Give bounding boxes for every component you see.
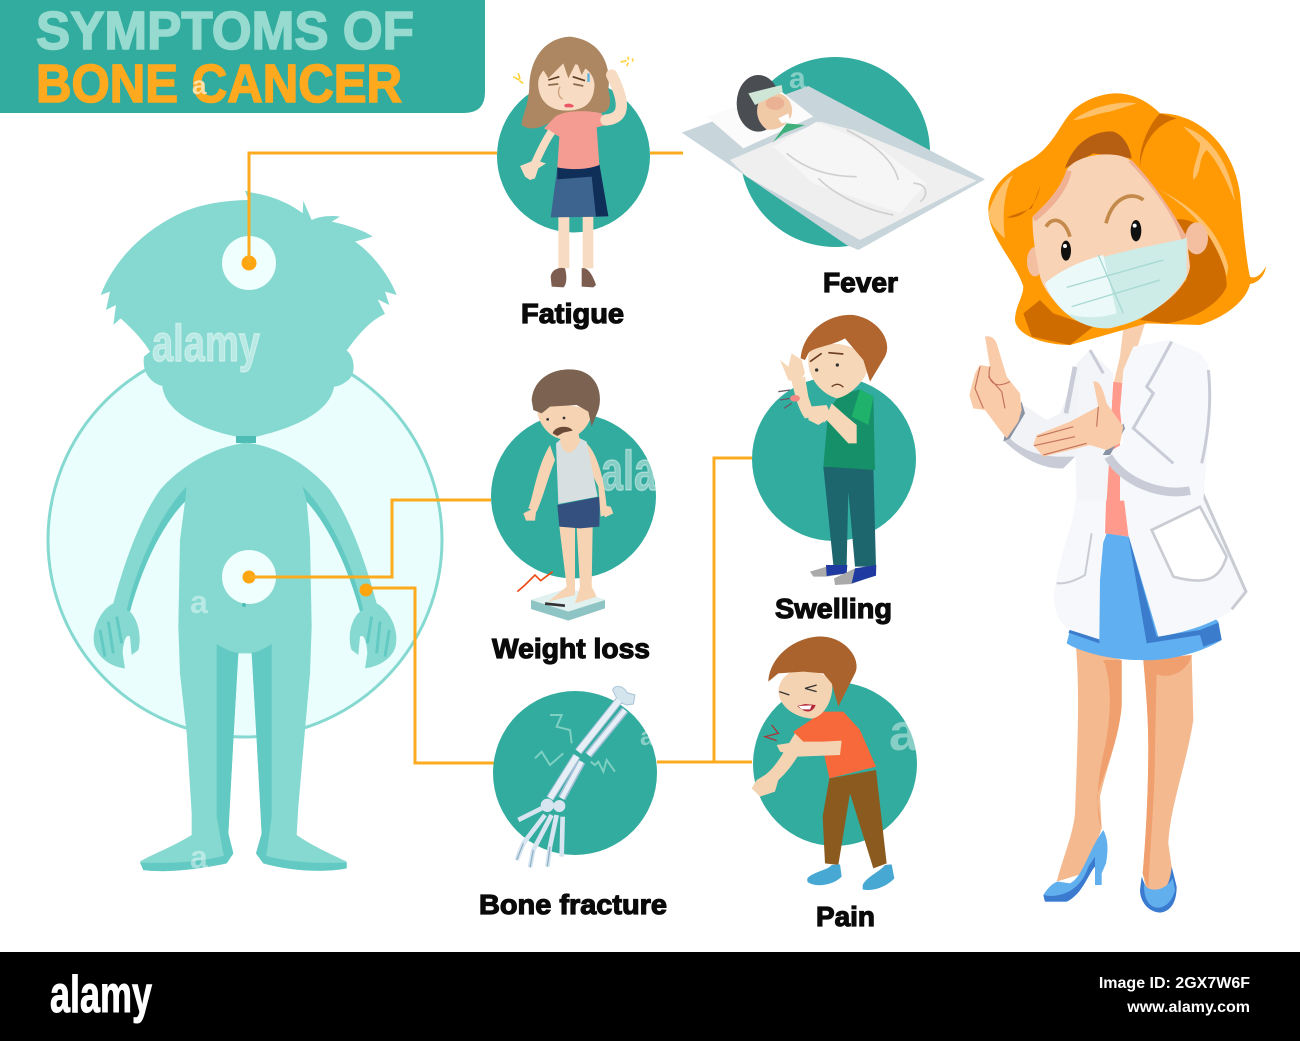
illustration: broken arm bones — [517, 686, 635, 867]
tumor marker: head — [222, 236, 276, 290]
illustration: doctor with mask — [969, 93, 1266, 913]
circle watermarks: ala — [601, 439, 657, 502]
teal symptom circles — [491, 57, 930, 855]
doctor lower hand — [1033, 381, 1123, 457]
label: fatigue: Fatigue — [521, 298, 624, 329]
circle watermarks — [601, 62, 919, 762]
doctor face mask — [1045, 238, 1187, 328]
doctor hair — [988, 93, 1266, 345]
circle watermarks: a — [889, 704, 919, 762]
head silhouette — [101, 191, 397, 437]
illustration: patient with fever in bed — [682, 75, 985, 250]
circle watermarks: a — [789, 62, 806, 95]
human body silhouette panel — [48, 191, 442, 875]
doctor face — [1033, 154, 1190, 328]
circle watermarks: a — [640, 721, 655, 751]
label: pain: Pain — [816, 901, 875, 932]
doctor ears — [1027, 222, 1208, 276]
body silhouette — [94, 443, 396, 871]
illustration: man losing weight on scale — [517, 369, 613, 621]
label: swelling: Swelling — [775, 593, 892, 624]
doctor lower body — [1043, 480, 1247, 913]
title: bone cancer: BONE CANCER — [36, 54, 402, 114]
neck — [236, 436, 256, 443]
label: fever: Fever — [823, 267, 898, 298]
label: weight loss: Weight loss — [492, 633, 650, 664]
watermark on head: alamy — [152, 315, 260, 373]
human body silhouette panel: a — [190, 839, 208, 875]
footer logo: alamy — [50, 966, 152, 1024]
pale background circle — [48, 343, 442, 737]
illustration: girl with fatigue — [513, 37, 633, 287]
doctor eyes — [1061, 220, 1141, 261]
human body silhouette panel: a — [190, 584, 208, 620]
title panel — [0, 0, 485, 114]
illustration: boy with swollen arm — [778, 315, 887, 585]
label: bone fracture: Bone fracture — [479, 889, 667, 920]
footer website: www.alamy.com — [1126, 999, 1250, 1016]
title: symptoms of: SYMPTOMS OF — [36, 1, 414, 61]
illustration: boy in pain — [752, 637, 894, 890]
doctor pointing hand — [969, 336, 1022, 438]
tumor marker: abdomen — [222, 550, 276, 607]
title panel: a — [192, 70, 207, 100]
footer bar — [0, 952, 1300, 1041]
doctor upper body — [969, 93, 1266, 501]
connector lines — [249, 153, 752, 763]
footer image id: Image ID: 2GX7W6F — [1099, 975, 1250, 992]
